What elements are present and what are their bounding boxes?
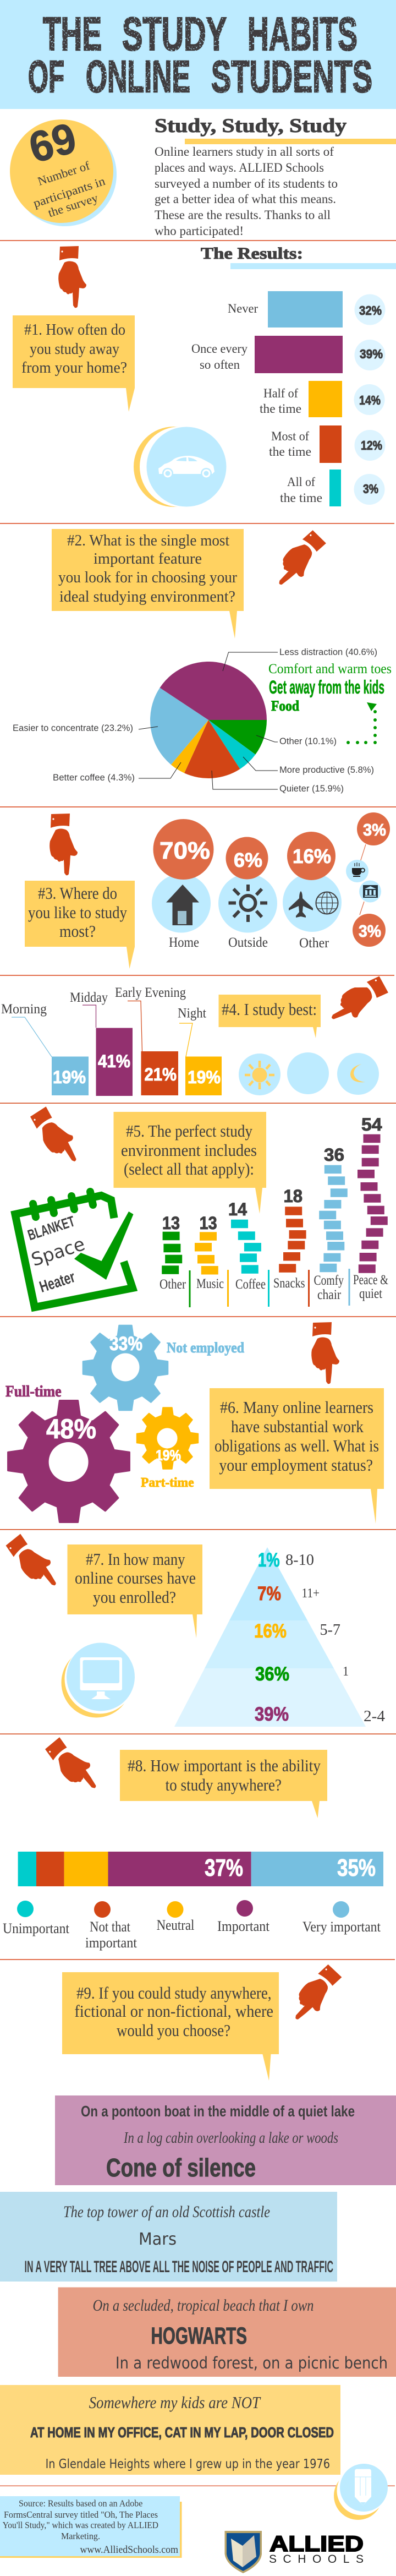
question box 1: from your home? <box>21 359 127 376</box>
stack: music <box>195 1213 229 1307</box>
stacked bar: importance: 37% <box>205 1854 243 1881</box>
title: OF <box>28 52 64 102</box>
stack: snacks <box>273 1186 310 1307</box>
bar chart: time of day: Morning <box>1 1002 47 1017</box>
bar chart: how often away from home: the time <box>280 491 322 505</box>
badge number: 69 <box>24 113 81 172</box>
question box 2 <box>52 529 244 638</box>
bar chart: how often away from home: Half of <box>263 386 298 400</box>
answer panel: purple: Cone of silence <box>106 2153 256 2182</box>
legend: importance <box>3 1900 381 1951</box>
answer panel: blue <box>0 2192 337 2282</box>
bar chart: time of day: Midday <box>70 990 108 1005</box>
icon: pencil circle <box>334 2464 388 2520</box>
stacked bar: importance <box>18 1852 383 1886</box>
icon: checklist notebook: Heater <box>37 1268 78 1296</box>
question box 7 <box>67 1544 202 1638</box>
stack: comfy chair: Comfy <box>314 1273 344 1288</box>
stack: comfy chair: 36 <box>324 1145 344 1165</box>
stack: snacks: Snacks <box>273 1276 305 1291</box>
question box 5: (select all that apply): <box>124 1159 254 1178</box>
bar chart: how often away from home: Once every <box>191 342 248 356</box>
title: THE <box>43 8 102 61</box>
gear: full-time <box>6 1383 129 1522</box>
item: coffee shop <box>346 812 390 882</box>
stack: peace and quiet <box>353 1115 388 1301</box>
bar chart: time of day: Early Evening <box>115 985 186 1000</box>
bar chart: time of day <box>1 985 222 1096</box>
intro paragraph: get a better idea of what this means. <box>155 192 336 206</box>
annotation: other responses: Comfort and warm toes <box>268 662 392 676</box>
item: other <box>283 832 342 951</box>
item: outside: Outside <box>228 935 268 950</box>
legend: importance: Not that <box>90 1919 131 1935</box>
intro paragraph: surveyed a number of its students to <box>155 177 338 190</box>
pie chart: most important feature: Less distraction (40.6%) <box>279 647 377 657</box>
question box 3 <box>25 881 135 969</box>
question box 6 <box>210 1388 384 1524</box>
intro paragraph: who participated! <box>155 224 244 238</box>
badge caption: Number of <box>36 159 92 188</box>
answer panel: purple <box>55 2095 396 2185</box>
question box 1: #1. How often do <box>24 321 125 339</box>
pyramid chart: number of courses: 5-7 <box>320 1621 340 1639</box>
gear: not employed: 33% <box>109 1333 142 1355</box>
icon: hand 7 <box>4 1529 64 1595</box>
stack: comfy chair: chair <box>317 1287 342 1302</box>
question box 7: #7. In how many <box>86 1549 185 1569</box>
gear: part-time: 19% <box>156 1447 181 1464</box>
question box 7: online courses have <box>75 1568 196 1587</box>
stack: snacks: 18 <box>284 1186 302 1206</box>
pyramid chart: number of courses: 11+ <box>301 1586 320 1601</box>
icon: hand 3 <box>50 814 78 875</box>
pyramid chart: number of courses: 7% <box>257 1583 281 1604</box>
icon: checklist notebook: BLANKET <box>26 1213 77 1243</box>
bar chart: time of day: 41% <box>98 1051 130 1071</box>
arrow: dotted green <box>346 702 377 744</box>
item: home: Home <box>169 935 199 950</box>
question box 5: #5. The perfect study <box>126 1121 252 1140</box>
pyramid chart: number of courses: 2-4 <box>364 1707 385 1725</box>
answer panel: yellow: In Glendale Heights where I grew up in the year 1976 <box>46 2457 330 2471</box>
intro paragraph: Online learners study in all sorts of <box>155 145 334 159</box>
question box 2: you look for in choosing your <box>58 569 237 586</box>
pie chart: most important feature <box>13 647 377 794</box>
source note: Source: Results based on an Adobe <box>19 2498 142 2509</box>
item: other: 16% <box>293 845 331 867</box>
stack: coffee: Coffee <box>235 1277 266 1292</box>
answer panel: yellow <box>0 2385 340 2475</box>
icon: checklist notebook: Space <box>29 1233 87 1270</box>
question box 2: #2. What is the single most <box>67 532 229 549</box>
badge caption: the survey <box>46 190 100 220</box>
icon: hand 9 <box>284 1963 347 2026</box>
gear: part-time: Part-time <box>141 1476 194 1490</box>
icon: hand 4 <box>324 975 392 1028</box>
bar chart: how often away from home: 14% <box>359 393 381 407</box>
pyramid chart: number of courses: 1% <box>258 1549 280 1571</box>
question box 9 <box>62 1972 279 2081</box>
pyramid chart: number of courses: 1 <box>343 1664 349 1679</box>
icon: hand 5 <box>29 1103 84 1170</box>
pyramid chart: number of courses: 8-10 <box>285 1551 314 1569</box>
question box 9: would you choose? <box>117 2021 230 2040</box>
question box 3: you like to study <box>28 903 127 922</box>
legend: importance: Unimportant <box>3 1920 70 1936</box>
question box 8 <box>120 1750 327 1818</box>
item: home: 70% <box>160 837 210 864</box>
gear: full-time: 48% <box>46 1413 96 1444</box>
heading: The Results: The Results: <box>201 244 303 263</box>
stack: other: 13 <box>162 1213 180 1233</box>
stack: peace and quiet: 54 <box>361 1115 382 1134</box>
icon: blank midday circle <box>287 1052 329 1094</box>
icon: crescent moon <box>337 1053 379 1095</box>
bar chart: how often away from home: so often <box>200 358 240 372</box>
bar chart: time of day: 21% <box>144 1065 177 1084</box>
icon: checklist notebook <box>15 1192 133 1307</box>
answer panel: salmon <box>58 2288 396 2377</box>
bar chart: time of day: Night <box>178 1006 206 1020</box>
question box 3: most? <box>59 921 96 941</box>
pie chart: most important feature: Other (10.1%) <box>279 736 337 746</box>
bar chart: time of day: 19% <box>53 1067 86 1087</box>
title: ONLINE <box>86 52 190 102</box>
question box 1: you study away <box>30 340 119 358</box>
stack: other: Other <box>160 1277 186 1292</box>
answer panel: blue: The top tower of an old Scottish castle <box>63 2203 270 2221</box>
answer panel: salmon: On a secluded, tropical beach that I own <box>92 2296 314 2315</box>
item: outside <box>218 837 277 950</box>
stack: music: 13 <box>200 1213 217 1233</box>
logo: Allied Schools: ALLIED <box>270 2532 364 2556</box>
icon: computer circle <box>62 1642 135 1717</box>
bar chart: how often away from home: Most of <box>271 429 309 443</box>
chart: where do you study <box>152 812 390 951</box>
stack: coffee <box>228 1199 270 1307</box>
item: home <box>152 819 213 950</box>
bar chart: how often away from home: 39% <box>360 347 383 361</box>
question box 4 <box>219 995 321 1038</box>
answer panel: purple: In a log cabin overlooking a lake or woods <box>123 2130 338 2147</box>
question box 7: you enrolled? <box>93 1587 176 1607</box>
source note: FormsCentral survey titled "Oh, The Places <box>4 2509 158 2520</box>
stack: coffee: 14 <box>228 1199 247 1219</box>
intro paragraph: places and ways. ALLIED Schools <box>155 161 324 174</box>
logo: Allied Schools: SCHOOLS <box>269 2553 364 2566</box>
icon: hand 2 <box>268 529 332 592</box>
item: coffee shop: 3% <box>363 820 386 839</box>
question box 2: ideal studying environment? <box>59 588 235 605</box>
icon: morning sun <box>239 1054 280 1095</box>
badge: 69 participants <box>10 113 117 226</box>
legend: importance: Neutral <box>157 1917 194 1933</box>
question box 6: have substantial work <box>231 1417 364 1436</box>
bar chart: how often away from home: 3% <box>363 482 378 496</box>
item: library: 3% <box>359 921 381 941</box>
question box 4: #4. I study best: <box>222 1000 317 1019</box>
question box 3: #3. Where do <box>38 883 117 903</box>
gear: not employed: Not employed <box>167 1340 244 1356</box>
pie chart: most important feature: More productive (5.8%) <box>279 765 374 775</box>
bar chart: how often away from home: All of <box>287 475 315 489</box>
question box 9: fictional or non-fictional, where <box>74 2001 273 2021</box>
intro paragraph <box>155 145 338 238</box>
question box 8: to study anywhere? <box>166 1775 282 1794</box>
stack: comfy chair <box>314 1145 350 1306</box>
legend: importance: Important <box>217 1918 270 1934</box>
title: STUDY <box>122 8 227 61</box>
badge caption <box>31 159 107 220</box>
question box 1 <box>13 315 135 412</box>
pyramid chart: number of courses: 36% <box>255 1663 289 1685</box>
icon: hand 6 <box>311 1322 339 1384</box>
answer panel: salmon: HOGWARTS <box>151 2323 247 2349</box>
bar chart: how often away from home: the time <box>269 445 311 459</box>
question box 9: #9. If you could study anywhere, <box>76 1983 272 2002</box>
stacked bar: importance: 35% <box>337 1854 376 1881</box>
legend: importance: Very important <box>302 1919 381 1935</box>
icon: hand 8 <box>43 1732 103 1798</box>
badge caption: participants in <box>31 174 107 210</box>
gear: part-time <box>137 1407 198 1490</box>
annotation: other responses: Food <box>271 698 299 714</box>
pie chart: most important feature: Easier to concentrate (23.2%) <box>13 723 133 733</box>
pie chart: most important feature: Better coffee (4.3%) <box>53 772 135 783</box>
bar chart: how often away from home <box>191 291 385 506</box>
source note: You'll Study," which was created by ALLIED <box>3 2520 158 2530</box>
heading: Study, Study, Study: Study, Study, Study <box>155 114 346 137</box>
answer panel: yellow: Somewhere my kids are NOT <box>89 2393 261 2412</box>
question box 2: important feature <box>94 550 202 567</box>
question box 5 <box>113 1112 266 1214</box>
question box 8: #8. How important is the ability <box>128 1756 321 1775</box>
question box 6: your employment status? <box>219 1455 373 1475</box>
stack: music: Music <box>196 1276 224 1291</box>
legend: importance: important <box>85 1935 138 1951</box>
intro paragraph: These are the results. Thanks to all <box>155 208 331 222</box>
item: library <box>353 881 386 947</box>
bar chart: time of day: 19% <box>188 1067 221 1087</box>
bar chart: how often away from home: 12% <box>361 438 382 452</box>
stack: other <box>160 1213 190 1307</box>
gear: full-time: Full-time <box>6 1383 62 1400</box>
title <box>28 8 372 102</box>
bar chart: how often away from home: 32% <box>359 303 382 318</box>
pie chart: most important feature: Quieter (15.9%) <box>279 783 344 794</box>
chart: perfect study environment stacks <box>160 1115 388 1307</box>
source note: Marketing. <box>61 2531 100 2541</box>
question box 5: environment includes <box>121 1140 257 1160</box>
item: outside: 6% <box>234 849 262 871</box>
icon: car circle <box>134 427 227 507</box>
icon: hand 1 <box>58 246 86 308</box>
pyramid chart: number of courses: 16% <box>254 1620 287 1642</box>
heading underline <box>185 139 396 144</box>
bar chart: how often away from home: Never <box>228 302 258 315</box>
gear: not employed <box>83 1325 244 1410</box>
stack: peace and quiet: quiet <box>359 1286 382 1301</box>
header banner <box>0 0 396 109</box>
results underline <box>230 263 396 269</box>
item: other: Other <box>299 936 329 951</box>
bar chart: how often away from home: the time <box>260 402 301 416</box>
logo: Allied Schools <box>224 2531 364 2573</box>
pyramid chart: number of courses <box>174 1547 385 1727</box>
answer panel: blue: Mars <box>139 2230 177 2249</box>
question box 6: #6. Many online learners <box>220 1398 373 1417</box>
pyramid chart: number of courses: 39% <box>255 1704 289 1725</box>
annotation: other responses <box>268 662 392 714</box>
source note: www.AlliedSchools.com <box>80 2544 178 2556</box>
source note <box>0 2496 182 2558</box>
